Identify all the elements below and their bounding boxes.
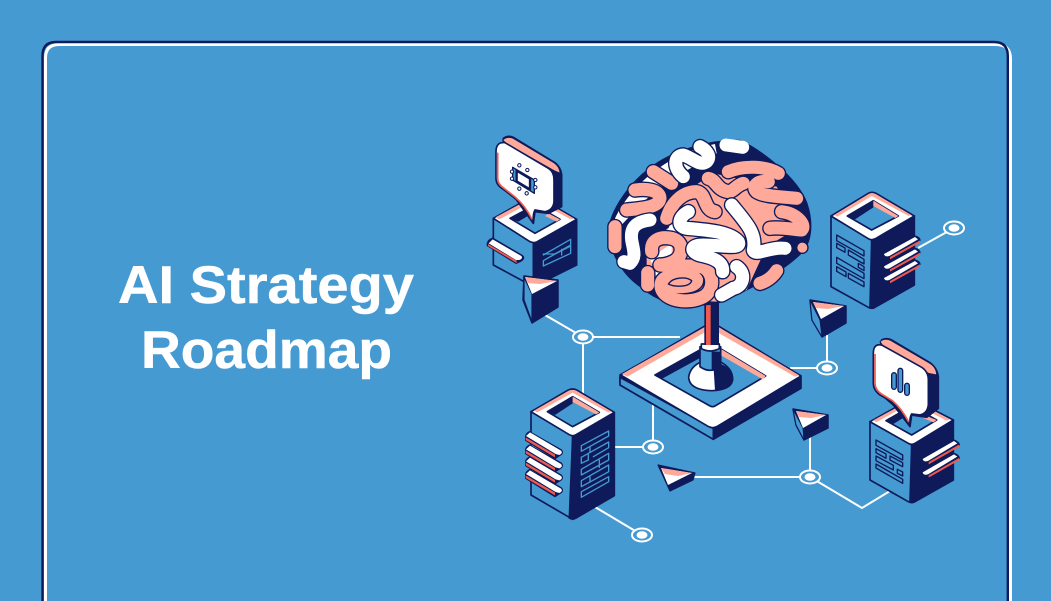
icon: upper-right server (831, 192, 921, 308)
icon: brain (608, 141, 811, 305)
server slot bar (487, 237, 524, 264)
icon: triangle marker upper right (810, 300, 846, 337)
pink folds outline (615, 167, 803, 301)
icon: triangle marker lower left (658, 465, 695, 491)
speech bubble (873, 339, 938, 427)
server slot bar (883, 248, 921, 272)
pink folds (615, 167, 803, 301)
icon: top-left server with chip speech bubble (487, 136, 577, 287)
speech bubble (496, 136, 562, 223)
server slot bar (525, 456, 563, 485)
white folds (624, 145, 785, 295)
server slot bar (921, 439, 960, 465)
brain silhouette (608, 141, 811, 305)
server slot bar (883, 235, 921, 260)
server slot bar (525, 444, 563, 473)
icon: central platform with pole (620, 298, 801, 439)
server circuit pattern (543, 239, 571, 266)
white folds outline (624, 147, 785, 295)
server circuit pattern (876, 440, 903, 483)
server circuit pattern (837, 235, 864, 287)
server slot bar (921, 453, 960, 478)
title (118, 256, 415, 380)
title: Roadmap (141, 321, 392, 380)
icon: chip (510, 164, 537, 195)
title: AI Strategy (118, 256, 415, 315)
icon: bar chart (892, 368, 909, 395)
server slot bar (883, 259, 921, 284)
icon: triangle marker near top-left server (523, 276, 558, 323)
icon: lower-right server with chart speech bubble (870, 339, 960, 502)
server slot bar (525, 431, 563, 459)
server circuit pattern (581, 431, 609, 497)
icon: lower-left server (525, 389, 614, 519)
icon: triangle marker middle right (793, 409, 828, 440)
connector lines and nodes (545, 222, 964, 542)
server slot bar (525, 469, 563, 497)
